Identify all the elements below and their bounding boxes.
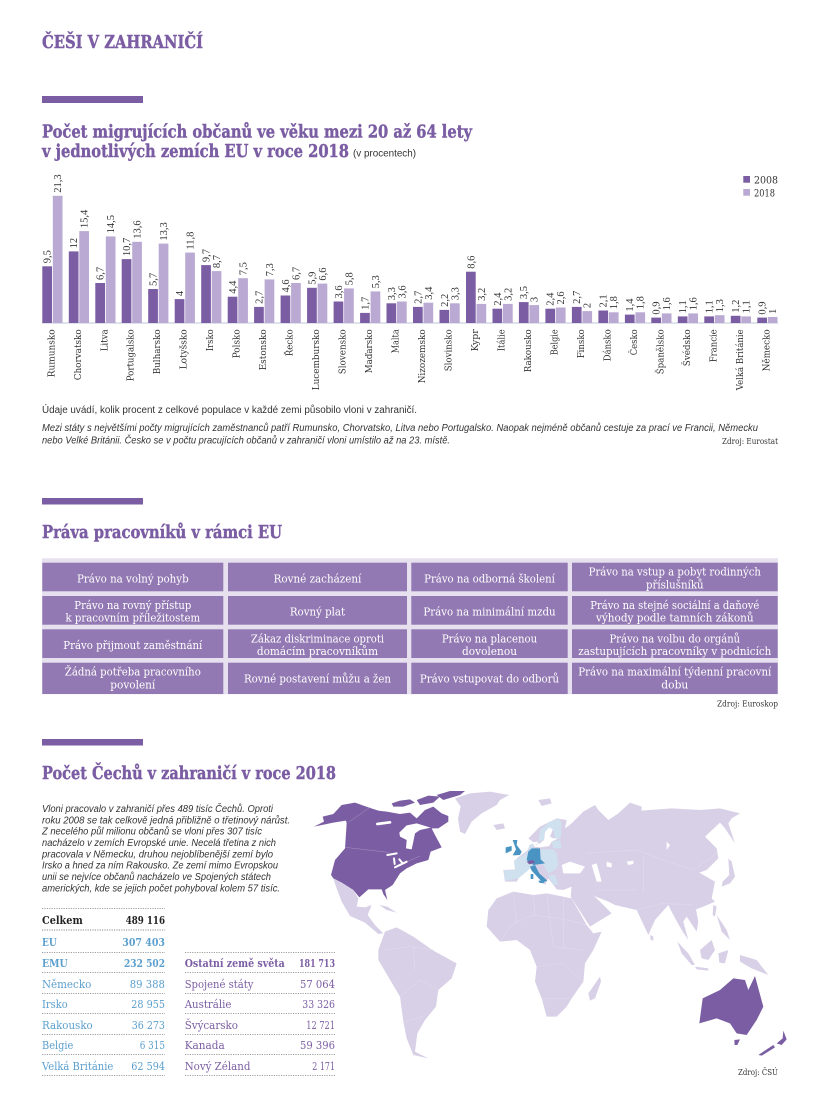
bars: Německo: Německo — [761, 329, 772, 371]
intro paragraph: Z necelého půl milionu občanů se vloni přes 307 tisíc — [41, 826, 262, 838]
Europe — [504, 818, 562, 885]
bars: Francie: 1,1 — [705, 300, 716, 313]
bars: Španělsko: 0,9 — [652, 301, 663, 315]
bars: Malta: Malta — [390, 329, 402, 353]
bars: Polsko: Polsko — [232, 329, 243, 358]
bars: Portugalsko: Portugalsko — [126, 329, 137, 381]
bars: Belgie — [545, 291, 567, 355]
Tasmania — [734, 1039, 740, 1045]
bars: Řecko: Řecko — [284, 329, 296, 356]
bars: Velká Británie — [731, 300, 753, 391]
cell: rovné postavení: Rovné postavení můžu a žen — [244, 671, 392, 685]
cell: rodinní příslušníci: příslušníků — [646, 577, 704, 591]
bars: Portugalsko — [122, 220, 144, 381]
table: EU: Belgie — [42, 1038, 73, 1052]
chart commentary — [42, 422, 758, 446]
bars: Slovensko: 5,8 — [344, 272, 355, 285]
cell: volba do orgánů: Právo na volbu do orgánů — [609, 631, 740, 645]
table: rest of world: 57 064 — [300, 977, 335, 991]
bars: Maďarsko: 1,7 — [360, 297, 371, 310]
table: EU: 28 955 — [131, 997, 165, 1011]
cell: pracovní doba — [572, 663, 778, 694]
bars: Estonsko: 2,7 — [254, 291, 265, 304]
cell: volný pohyb — [42, 563, 223, 591]
bars: Lotyšsko — [175, 232, 196, 369]
bars: Lotyšsko: 11,8 — [185, 232, 196, 250]
bars: Finsko: Finsko — [576, 329, 587, 358]
table: rest of world: Ostatní země světa — [185, 956, 285, 970]
bars: Belgie: 2,6 — [556, 291, 567, 304]
bars: Bulharsko: Bulharsko — [152, 329, 163, 374]
bars: Slovensko — [334, 272, 355, 374]
cell: pracovní povolení: Žádná potřeba pracovního — [65, 665, 201, 679]
bars: Nizozemsko: Nizozemsko — [417, 329, 428, 383]
bars: Slovensko: 3,6 — [334, 285, 345, 298]
cell: zákaz diskriminace: domácím pracovníkům — [257, 644, 378, 658]
bars: Česko: Česko — [628, 329, 640, 355]
bars: Chorvatsko: 12 — [69, 238, 80, 248]
bars: Irsko: 9,7 — [201, 249, 212, 262]
source: Euroskop: Zdroj: Euroskop — [717, 700, 778, 710]
bars: Nizozemsko: 3,4 — [424, 286, 435, 300]
title: ČEŠI V ZAHRANIČÍ — [42, 30, 203, 53]
bars: Francie — [704, 299, 726, 362]
cell: rovný přístup: k pracovním příležitostem — [65, 611, 200, 625]
heading: rights: Práva pracovníků v rámci EU — [42, 521, 282, 543]
intro paragraph — [41, 802, 290, 894]
Sea cut-outs — [527, 827, 670, 882]
bars: Česko: 1,8 — [636, 296, 647, 309]
bars: Litva — [95, 215, 117, 351]
bars: Švédsko: Švédsko — [681, 329, 693, 366]
EMU and UK — [506, 840, 547, 883]
North America: USA and Canada — [314, 791, 465, 900]
table: EU: 62 594 — [131, 1059, 165, 1073]
bars: Kypr — [466, 256, 488, 351]
table: rest of world: 2 171 — [312, 1059, 335, 1073]
bars: Velká Británie: Velká Británie — [735, 329, 746, 391]
intro paragraph: Vloni pracovalo v zahraničí přes 489 tisíc Čechů. Oproti — [42, 802, 274, 815]
rights grid — [42, 558, 778, 694]
cell: rodinní příslušníci — [572, 563, 778, 591]
cell: rovné zacházení — [228, 563, 407, 591]
table: EU: 36 273 — [132, 1018, 165, 1032]
bars: Bulharsko: 13,3 — [159, 222, 170, 241]
bars: Itálie: 2,4 — [493, 292, 504, 306]
bars: Dánsko: Dánsko — [602, 329, 613, 361]
bars: Polsko: 4,4 — [228, 280, 239, 294]
cell: rovný přístup: Právo na rovný přístup — [74, 598, 191, 612]
heading: migration chart: Počet migrujících občanů ve věku mezi 20 až 64 lety — [42, 120, 472, 142]
table: rest of world: Švýcarsko — [185, 1018, 238, 1032]
bars: Kypr: 8,6 — [466, 256, 477, 269]
legend: 2008 — [754, 176, 778, 186]
bars: Irsko: 8,7 — [212, 255, 223, 268]
table: EU: EU — [42, 935, 57, 949]
chart commentary: nebo Velké Británii. Česko se v počtu pracujících občanů v zahraničí vloni umístilo až na 23. místě. — [42, 434, 450, 446]
bars: Řecko: 6,7 — [291, 267, 302, 280]
bars: Švédsko — [678, 297, 700, 366]
bars: Estonsko: Estonsko — [258, 329, 269, 370]
cell: pracovní doba: Právo na maximální týdenní pracovní — [578, 665, 772, 679]
bars: Estonsko: 7,3 — [265, 263, 276, 276]
bars: Rakousko: Rakousko — [523, 329, 534, 372]
table: EU: Velká Británie — [41, 1059, 113, 1073]
bars: Irsko: Irsko — [205, 329, 216, 351]
cell: placená dovolená: dovolenou — [462, 644, 517, 658]
table: rest of world: 59 396 — [300, 1038, 335, 1052]
bars: Francie: 1,3 — [715, 299, 726, 312]
bars: Francie: Francie — [708, 329, 719, 362]
bars: Lucembursko: Lucembursko — [311, 329, 322, 390]
bars: Litva: 14,5 — [106, 215, 117, 233]
country borders — [385, 850, 717, 1022]
cell: minimální mzda: Právo na minimální mzdu — [423, 605, 556, 619]
heading: migration chart: v jednotlivých zemích EU v roce 2018 — [41, 141, 349, 162]
bars: Chorvatsko — [69, 209, 91, 380]
cell: volba do orgánů — [572, 629, 778, 658]
bars: Malta: 3,6 — [397, 285, 408, 298]
bars: Lotyšsko: Lotyšsko — [179, 329, 190, 369]
bars: Slovinsko — [440, 287, 461, 371]
bars: Německo — [757, 301, 779, 371]
cell: odbory — [411, 663, 568, 694]
Japan and islands — [493, 798, 768, 975]
cell: pracovní povolení: povolení — [110, 677, 156, 691]
cell: rovný plat: Rovný plat — [290, 605, 345, 619]
bars: Kypr: Kypr — [470, 329, 481, 351]
table: rest of world: 33 326 — [302, 997, 335, 1011]
table: rest of world: 181 713 — [299, 956, 335, 970]
section bar: rights — [42, 498, 143, 504]
bars: Portugalsko: 10,7 — [122, 238, 133, 256]
heading: Czechs abroad: Počet Čechů v zahraničí v roce 2018 — [42, 761, 336, 784]
bars: Slovinsko: 2,2 — [440, 294, 451, 307]
bars: Velká Británie: 1,2 — [731, 300, 742, 313]
intro paragraph: nacházelo v zemích Evropské unie. Necelá třetina z nich — [42, 838, 276, 849]
intro paragraph: amerických, kde se jejich počet pohyboval kolem 57 tisíc. — [42, 883, 280, 894]
cell: rovné postavení — [228, 663, 407, 694]
bars: Irsko — [201, 249, 223, 351]
bars: Maďarsko: 5,3 — [371, 275, 382, 288]
bars: Slovinsko: Slovinsko — [444, 329, 454, 371]
cell: odbory: Právo vstupovat do odborů — [420, 671, 559, 685]
bars: Německo: 1 — [768, 309, 779, 314]
intro paragraph: unii se nejvíce občanů nacházelo ve Spojených státech — [42, 871, 271, 883]
Australia — [699, 976, 763, 1035]
table: EU: 489 116 — [126, 913, 165, 927]
table: EU: Celkem — [42, 913, 83, 927]
table: rest of world: Kanada — [185, 1038, 225, 1052]
bars: Švédsko: 1,1 — [678, 300, 689, 313]
table: EU: 6 315 — [140, 1038, 165, 1052]
Great Lakes and Great Slave Lake — [377, 822, 407, 867]
cell: rodinní příslušníci: Právo na vstup a pobyt rodinných — [589, 565, 761, 579]
bars: Lucembursko — [307, 267, 329, 390]
bars: Chorvatsko: 15,4 — [80, 209, 91, 228]
cell: pracovní povolení — [42, 663, 223, 694]
cell: zákaz diskriminace — [228, 629, 407, 658]
bars: Maďarsko — [360, 275, 382, 373]
table: rest of world: Spojené státy — [185, 977, 254, 991]
Greenland — [455, 792, 509, 834]
New Zealand — [758, 1031, 787, 1056]
bars: Finsko — [572, 291, 594, 358]
cell: placená dovolená — [411, 629, 568, 658]
bars: Belgie: 2,4 — [546, 292, 557, 306]
bars: Rumunsko — [42, 174, 64, 377]
cell: pracovní doba: dobu — [661, 677, 688, 691]
bars: Litva: 6,7 — [96, 267, 107, 280]
South America — [378, 927, 457, 1058]
bars: Řecko: 4,6 — [281, 279, 292, 292]
bars: Česko: 1,4 — [625, 298, 636, 312]
cell: sociální výhody: výhody podle tamních zákonů — [595, 611, 754, 625]
section bar: Czechs abroad — [42, 739, 143, 746]
bars: Česko — [625, 296, 647, 355]
bars: Rumunsko: Rumunsko — [46, 329, 57, 377]
chart note: Údaje uvádí, kolik procent z celkové populace v každé zemi působilo vloni v zahraničí. — [42, 403, 417, 416]
source: Eurostat: Zdroj: Eurostat — [722, 437, 778, 447]
table: rest of world: 12 721 — [306, 1018, 335, 1032]
intro paragraph: pracovala v Německu, druhou nejoblíbenější zemí bylo — [41, 849, 273, 860]
bars: Rumunsko: 21,3 — [53, 174, 64, 193]
bars: Polsko — [228, 262, 250, 358]
bars: Bulharsko: 5,7 — [148, 273, 159, 286]
bars: Finsko: 2 — [583, 303, 594, 308]
bars: Itálie: Itálie — [496, 329, 508, 351]
table: EU: 232 502 — [124, 956, 165, 970]
Switzerland — [527, 860, 535, 864]
bars: Itálie: 3,2 — [503, 288, 514, 301]
cell: rovné zacházení: Rovné zacházení — [274, 571, 362, 585]
Mexico and Central America — [333, 878, 383, 934]
cell: rovný plat — [228, 596, 407, 625]
world map — [314, 791, 787, 1058]
bars: Rakousko: 3 — [530, 297, 541, 302]
bars: Malta — [386, 285, 408, 353]
intro paragraph: roku 2008 se tak celkově jedná přibližně o třetinový nárůst. — [42, 814, 290, 826]
bars: Německo: 0,9 — [758, 301, 769, 315]
legend — [743, 176, 778, 200]
bars: Nizozemsko — [413, 286, 435, 383]
section bar: migration — [42, 96, 143, 103]
table: EU: EMU — [42, 956, 68, 970]
Caribbean islands — [379, 905, 397, 913]
bars: Chorvatsko: Chorvatsko — [73, 329, 84, 380]
table: rest of world — [184, 952, 335, 1075]
bars: Velká Británie: 1,1 — [742, 300, 753, 313]
bars: Malta: 3,3 — [387, 287, 398, 300]
bars: Slovinsko: 3,3 — [450, 287, 461, 300]
bars: Portugalsko: 13,6 — [132, 220, 143, 239]
intro paragraph: Irsko a hned za ním Rakousko. Ze zemí mimo Evropskou — [42, 861, 278, 872]
bars: Dánsko — [598, 294, 620, 361]
Eurasia — [503, 803, 740, 940]
bars: Dánsko: 2,1 — [599, 294, 610, 308]
Madagascar — [588, 977, 601, 1001]
bars: Estonsko — [254, 263, 276, 370]
table: EU: Německo — [42, 977, 91, 991]
bars: Lucembursko: 5,9 — [307, 272, 318, 285]
bars: Španělsko: 1,6 — [662, 297, 673, 310]
bars: Polsko: 7,5 — [238, 262, 249, 275]
table: EU: 89 388 — [130, 977, 165, 991]
table: rest of world: Austrálie — [184, 997, 232, 1011]
cell: sociální výhody: Právo na stejné sociální a daňové — [590, 598, 759, 612]
chart commentary: Mezi státy s největšími počty migrujících zaměstnanců patří Rumunsko, Chorvatsko, Litva nebo Portugalsko. Naopak nejméně občanů cestuje za prací ve Francii, Německu — [42, 422, 758, 434]
bars: Maďarsko: Maďarsko — [364, 329, 375, 373]
cell: odborná školení: Právo na odborná školení — [424, 571, 555, 585]
bars: Švédsko: 1,6 — [689, 297, 700, 310]
table: EU: Rakousko — [42, 1018, 93, 1032]
bars: Litva: Litva — [99, 329, 110, 351]
table: EU: Irsko — [42, 997, 68, 1011]
cell: odborná školení — [411, 563, 568, 591]
bar chart — [42, 174, 779, 391]
bars: Rakousko — [519, 286, 541, 372]
bars: Nizozemsko: 2,7 — [413, 291, 424, 304]
bars: Španělsko — [651, 297, 673, 374]
Hudson Bay — [399, 823, 431, 849]
bars: Řecko — [281, 267, 302, 356]
legend: 2018 — [754, 188, 775, 200]
bars: Belgie: Belgie — [549, 329, 560, 355]
cell: placená dovolená: Právo na placenou — [442, 631, 537, 645]
cell: přijmout zaměstnání — [42, 629, 223, 658]
table: rest of world: Nový Zéland — [185, 1059, 251, 1073]
EU members — [504, 818, 562, 885]
Africa — [487, 892, 602, 1017]
bars: Španělsko: Španělsko — [654, 329, 666, 374]
cell: minimální mzda — [411, 596, 568, 625]
bars: Lucembursko: 6,6 — [318, 267, 329, 281]
heading: migration chart — [41, 120, 472, 162]
table: EU: 307 403 — [122, 935, 165, 949]
bars: Kypr: 3,2 — [477, 288, 488, 301]
heading: migration chart: (v procentech) — [353, 148, 416, 160]
cell: volba do orgánů: zastupujících pracovníky v podnicích — [578, 644, 772, 658]
bars: Finsko: 2,7 — [572, 291, 583, 304]
USA and Canada border — [345, 807, 420, 862]
bars: Itálie — [492, 288, 514, 351]
cell: volný pohyb: Právo na volný pohyb — [77, 571, 189, 585]
bars: Bulharsko — [148, 222, 170, 374]
source: ČSÚ: Zdroj: ČSÚ — [738, 1066, 778, 1078]
bars: Dánsko: 1,8 — [609, 296, 620, 309]
cell: sociální výhody — [572, 596, 778, 625]
cell: přijmout zaměstnání: Právo přijmout zaměstnání — [63, 638, 203, 652]
cell: rovný přístup — [42, 596, 223, 625]
bars: Rumunsko: 9,5 — [43, 250, 54, 263]
table: EU — [41, 908, 165, 1075]
cell: zákaz diskriminace: Zákaz diskriminace oproti — [251, 631, 384, 645]
bars: Rakousko: 3,5 — [519, 286, 530, 299]
bars: Lotyšsko: 4 — [175, 290, 186, 296]
bars: Slovensko: Slovensko — [338, 329, 349, 374]
